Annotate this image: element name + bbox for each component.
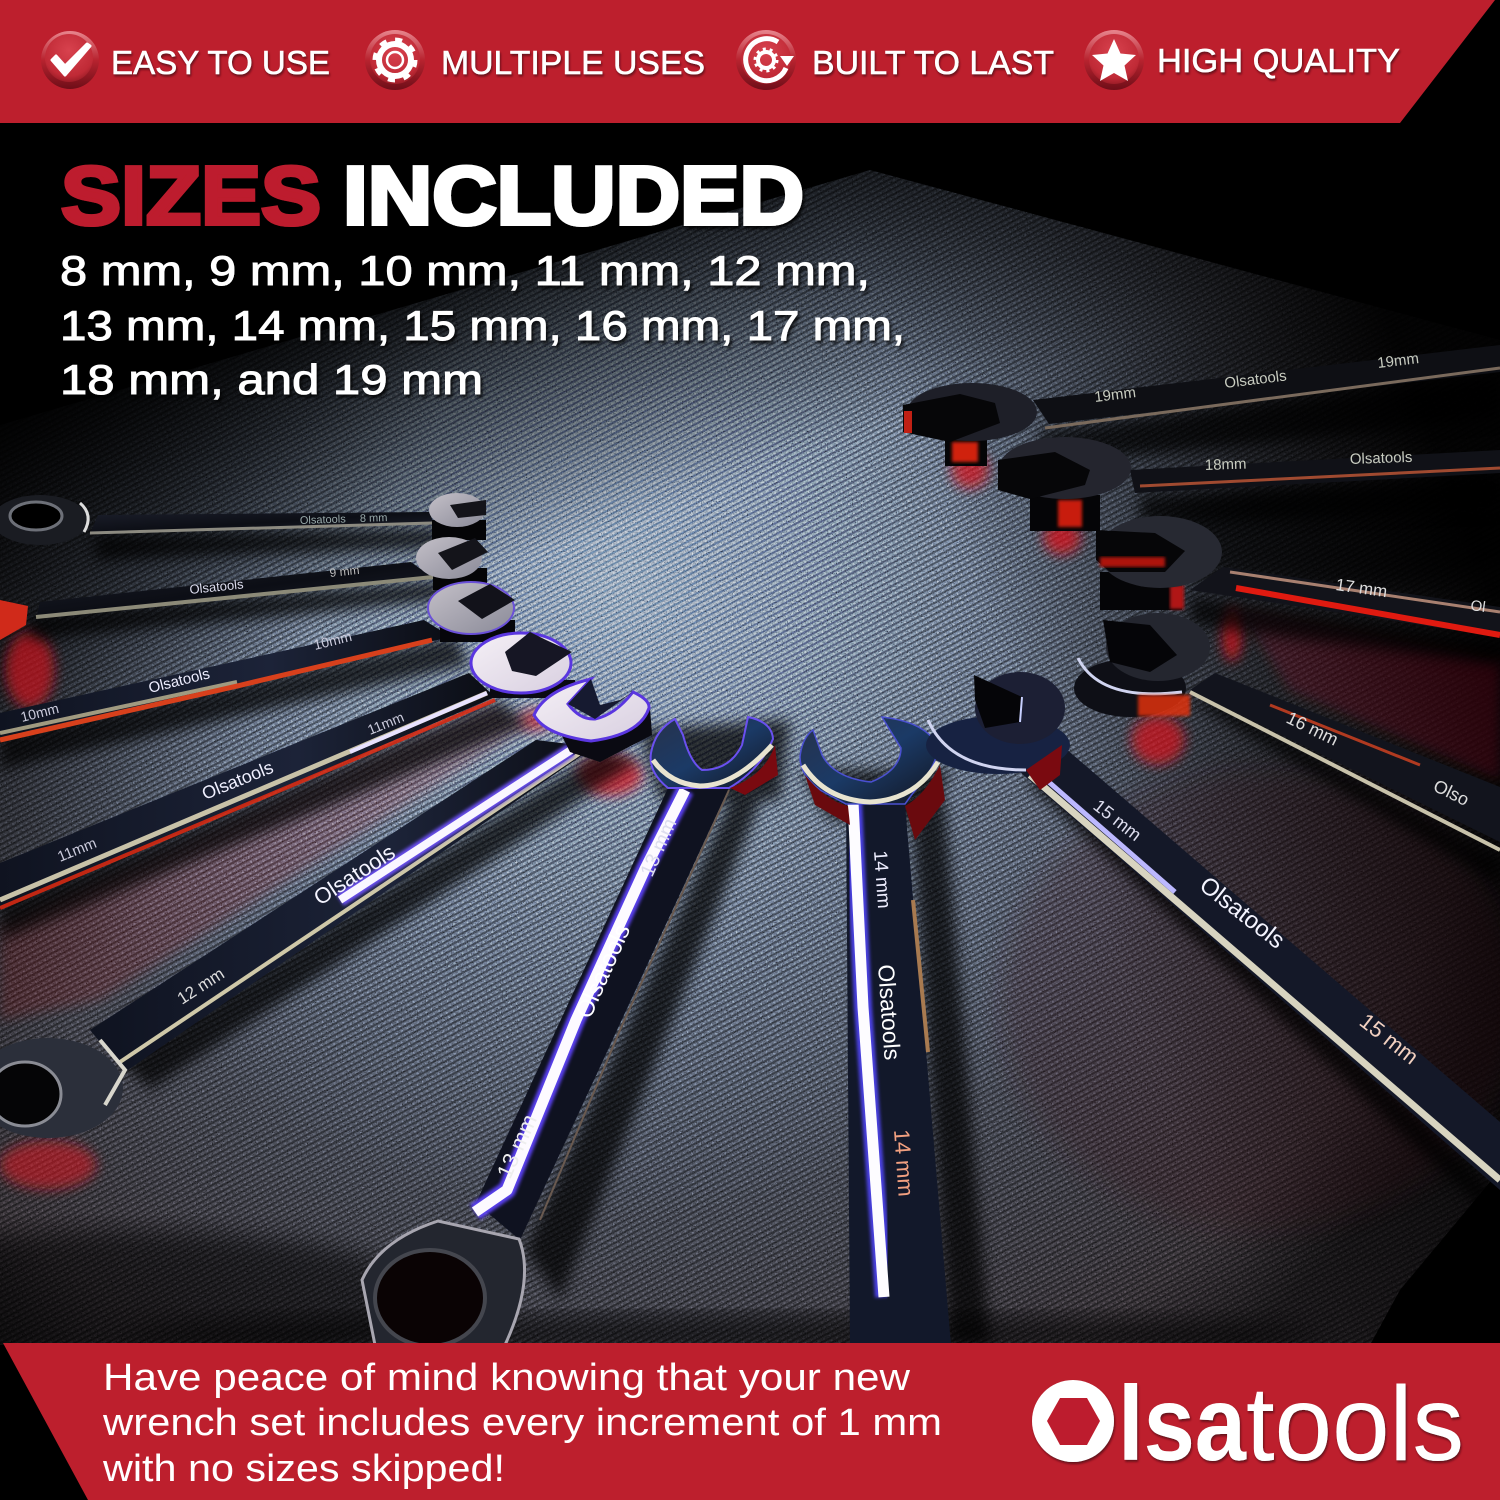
wrench 16 mm bbox=[1074, 613, 1500, 850]
wrench 10 mm: 10mm bbox=[312, 628, 353, 653]
wrench 13 mm: 13 mm bbox=[492, 1110, 542, 1182]
wrench 9 mm: 9 mm bbox=[329, 563, 360, 580]
wrench 13 mm bbox=[362, 717, 778, 1346]
textured mat bbox=[0, 170, 1500, 1345]
logo: Olsatools bbox=[1032, 1365, 1464, 1483]
wrench 9 mm bbox=[0, 537, 488, 640]
wrench 18 mm: Olsatools bbox=[1350, 449, 1413, 468]
wrench 18 mm bbox=[998, 437, 1500, 531]
wrench 10 mm: Olsatools bbox=[147, 665, 212, 697]
top banner bbox=[0, 0, 1495, 123]
wrench 16 mm: 16 mm bbox=[1283, 708, 1341, 750]
wrench 13 mm: Olsatools bbox=[571, 920, 636, 1022]
heading: SIZES bbox=[61, 149, 321, 242]
heading bbox=[61, 149, 804, 242]
sizes list text: 8 mm, 9 mm, 10 mm, 11 mm, 12 mm, bbox=[60, 247, 870, 294]
wrench 11 mm: 11mm bbox=[365, 709, 406, 738]
sizes list text: 18 mm, and 19 mm bbox=[60, 356, 483, 403]
wrench 17 mm: 17 mm bbox=[1334, 575, 1389, 601]
wrench 15 mm: Olsatools bbox=[1194, 871, 1290, 954]
wrench 8 mm bbox=[0, 493, 486, 545]
wrench 14 mm bbox=[800, 717, 951, 1345]
wrench 13 mm: 13 mm bbox=[636, 815, 681, 880]
logo: Olsatools: tools bbox=[1246, 1365, 1464, 1483]
reassurance text bbox=[102, 1357, 942, 1490]
contact shadows under wrenches bbox=[0, 375, 1500, 1345]
wrench 12 mm: Olsatools bbox=[309, 839, 400, 910]
label: multiple uses: MULTIPLE USES bbox=[441, 44, 705, 81]
wrench 8 mm: Olsatools bbox=[300, 513, 346, 527]
wrench 8 mm: 8 mm bbox=[360, 512, 388, 525]
wrench 15 mm: 15 mm bbox=[1355, 1008, 1423, 1069]
wrench 12 mm: 12 mm bbox=[174, 964, 228, 1008]
sizes list text bbox=[60, 247, 905, 403]
label: easy to use: EASY TO USE bbox=[111, 44, 330, 81]
wrench 11 mm: Olsatools bbox=[199, 757, 276, 804]
wrench 16 mm: Olso bbox=[1430, 776, 1472, 810]
wrench 15 mm bbox=[926, 672, 1500, 1190]
heading: INCLUDED bbox=[343, 149, 804, 242]
logo: Olsatools: O bbox=[1040, 1366, 1110, 1478]
wrench 14 mm: 14 mm bbox=[889, 1129, 919, 1197]
wrench 12 mm bbox=[0, 679, 652, 1138]
logo: Olsatools: lsa bbox=[1118, 1365, 1247, 1483]
reassurance text: wrench set includes every increment of 1 mm bbox=[102, 1402, 942, 1444]
wrench 14 mm: 14 mm bbox=[869, 850, 894, 909]
icon: gear badge bbox=[365, 30, 425, 90]
wrench 11 mm bbox=[0, 632, 575, 910]
icon: check mark badge bbox=[41, 31, 99, 89]
wrench 9 mm: Olsatools bbox=[189, 576, 245, 597]
wrench 19 mm: 19mm bbox=[1093, 384, 1137, 406]
wrench 10 mm: 10mm bbox=[19, 700, 60, 725]
wrench 10 mm bbox=[0, 582, 515, 740]
icon: gear with cycle arrow badge bbox=[736, 30, 796, 90]
icon: star badge bbox=[1084, 30, 1144, 90]
reassurance text: Have peace of mind knowing that your new bbox=[103, 1357, 911, 1399]
label: built to last: BUILT TO LAST bbox=[812, 44, 1054, 81]
wrench 15 mm: 15 mm bbox=[1090, 795, 1145, 845]
wrench 18 mm: 18mm bbox=[1205, 456, 1247, 474]
sizes list text: 13 mm, 14 mm, 15 mm, 16 mm, 17 mm, bbox=[60, 302, 905, 349]
reassurance text: with no sizes skipped! bbox=[102, 1448, 505, 1490]
bottom banner bbox=[3, 1343, 1500, 1500]
label: high quality: HIGH QUALITY bbox=[1157, 42, 1400, 79]
wrench 11 mm: 11mm bbox=[55, 835, 99, 866]
wrench 19 mm: Olsatools bbox=[1223, 367, 1288, 392]
wrench 19 mm: 19mm bbox=[1376, 350, 1420, 372]
wrench 17 mm: Ol bbox=[1469, 597, 1487, 616]
wrench 17 mm bbox=[1096, 516, 1500, 637]
wrench 14 mm: Olsatools bbox=[873, 964, 906, 1061]
wrench 19 mm bbox=[903, 345, 1500, 466]
red reflected glows bbox=[0, 452, 1500, 1189]
